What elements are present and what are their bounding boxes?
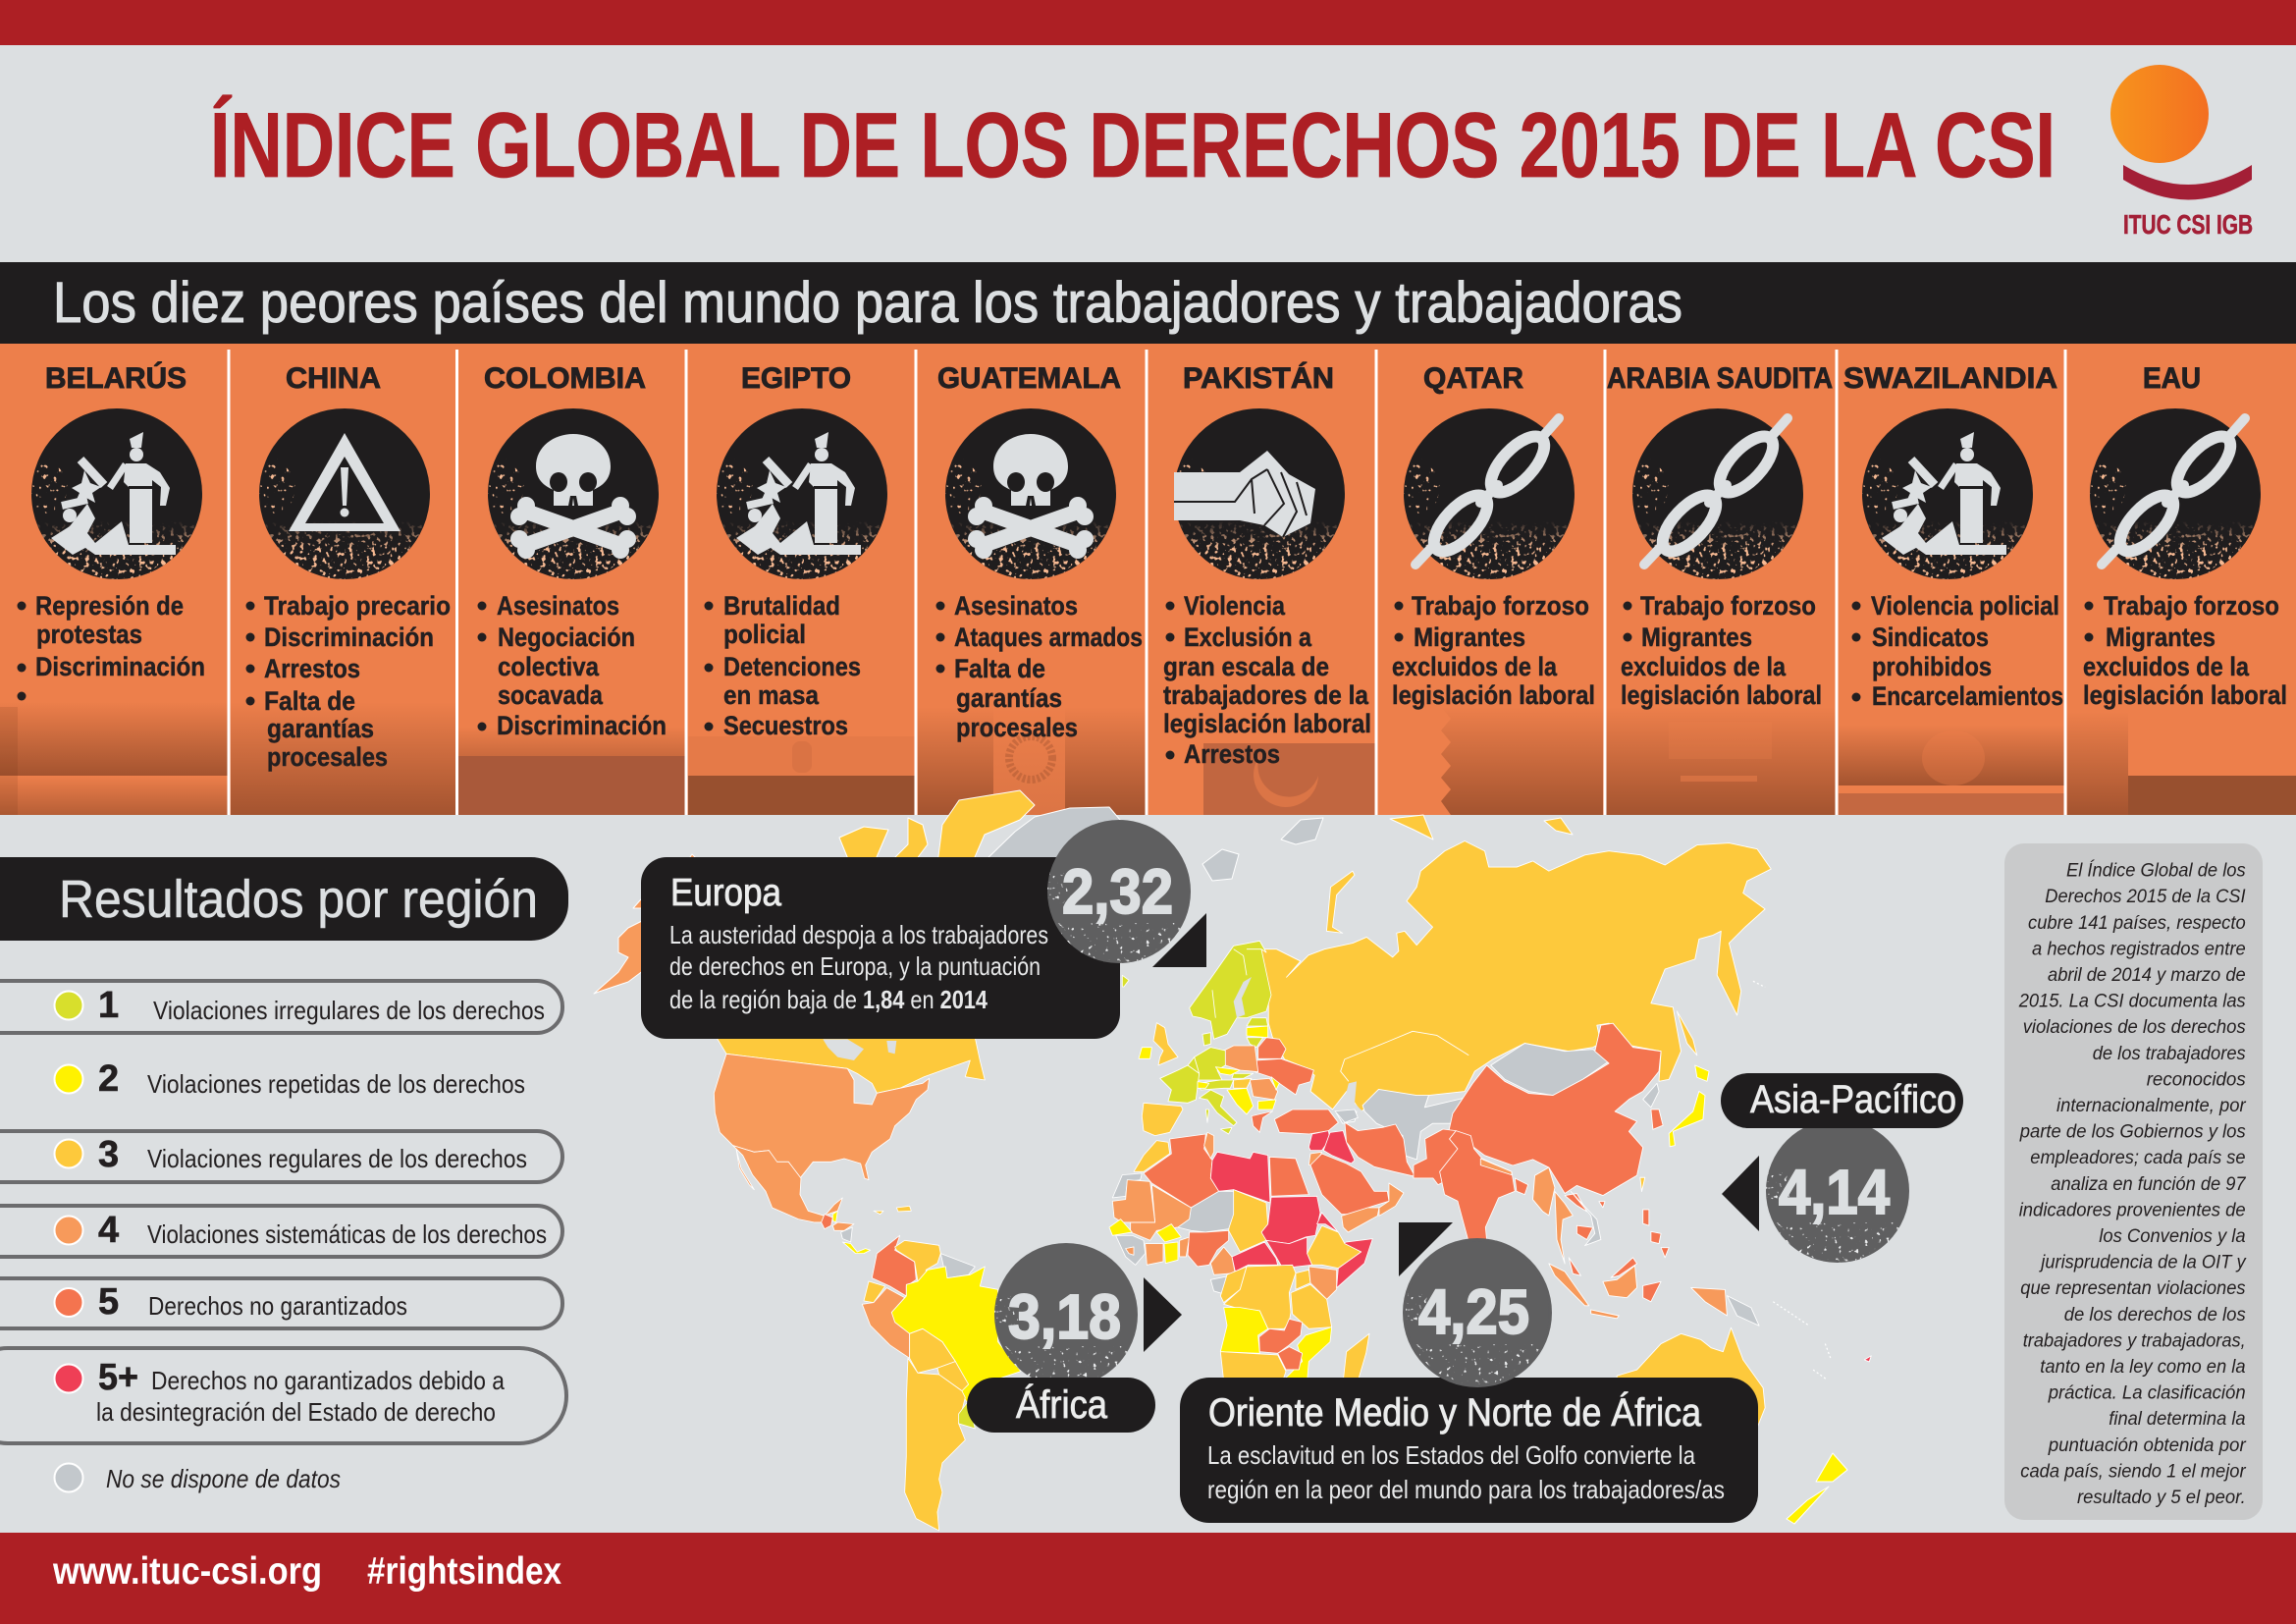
panel: China: garantías (267, 714, 374, 743)
legend: level 5+ (55, 1357, 505, 1427)
panel: Arabia Saudita: excluidos de la (1621, 652, 1787, 681)
panel: Guatemala: procesales (956, 713, 1078, 742)
callout: Europa: 2,32 (1062, 856, 1173, 927)
footer bar: #rightsindex (367, 1550, 561, 1593)
text block: methodology note: internacionalmente, por (2056, 1095, 2247, 1116)
subtitle band: Los diez peores países del mundo para los trabajadores y trabajadoras (53, 271, 1682, 335)
legend: level 5+: 5+ (98, 1357, 138, 1398)
text block: methodology note: violaciones de los derechos (2023, 1016, 2246, 1038)
panel: Guatemala: Asesinatos (954, 591, 1078, 621)
legend: level 3 (55, 1134, 527, 1175)
panel: Qatar (1392, 362, 1603, 815)
callout: Europa: Europa (670, 872, 781, 914)
world map (594, 790, 1871, 1531)
text block: methodology note: jurisprudencia de la OIT y (2038, 1252, 2247, 1273)
legend: level 4 (55, 1210, 547, 1251)
legend: level 1: Violaciones irregulares de los derechos (153, 996, 545, 1025)
panel: Egipto: Detenciones (723, 652, 861, 681)
panel: Swazilandia: prohibidos (1872, 652, 1992, 681)
text block: methodology note: de los trabajadores (2093, 1043, 2246, 1064)
callout: África: África (1016, 1382, 1108, 1427)
panel: EAU: Trabajo forzoso (2104, 591, 2279, 621)
subtitle band (0, 262, 2296, 344)
panel: China: procesales (267, 742, 388, 772)
panel: Colombia: colectiva (498, 652, 600, 681)
text block: methodology note: 2015. La CSI documenta las (2018, 991, 2246, 1012)
text block: methodology note: cubre 141 países, respecto (2028, 912, 2246, 934)
panel: Egipto: Secuestros (723, 711, 848, 740)
text block: methodology note: práctica. La clasificación (2048, 1382, 2246, 1404)
callout: Oriente Medio y Norte de África: región en la peor del mundo para los trabajadores/as (1207, 1475, 1725, 1504)
panel: China: Arrestos (264, 654, 360, 683)
map: New Zealand (1787, 1453, 1847, 1524)
panel: Swazilandia: Sindicatos (1872, 623, 1989, 652)
panel: Egipto: en masa (723, 680, 820, 710)
panel: results by region header (0, 857, 568, 941)
panel: Pakistán: Violencia (1184, 591, 1286, 621)
panel: EAU: Migrantes (2106, 623, 2216, 652)
text block: methodology note: que representan violaciones (2020, 1277, 2246, 1299)
legend: level 5+: Derechos no garantizados debido a (151, 1366, 505, 1395)
legend: level 4: 4 (98, 1210, 119, 1251)
legend: level 1 (55, 985, 545, 1026)
text block: methodology note: reconocidos (2147, 1068, 2246, 1090)
text block: methodology note: cada país, siendo 1 el mejor (2020, 1460, 2247, 1482)
text block: methodology note: analiza en función de 97 (2051, 1173, 2247, 1195)
panel: Belarús (0, 361, 228, 815)
callout: Europa (641, 820, 1206, 1039)
panel: Colombia: Asesinatos (497, 591, 619, 621)
legend: level 5 (55, 1281, 407, 1323)
text block: methodology note: puntuación obtenida por (2048, 1435, 2247, 1456)
panel: Qatar: QATAR (1423, 362, 1523, 395)
panel: Qatar: legislación laboral (1392, 680, 1595, 710)
legend: level 2 (55, 1058, 525, 1100)
panel: Colombia: Discriminación (497, 711, 667, 740)
panel: Guatemala: GUATEMALA (937, 362, 1121, 395)
callout: Europa: La austeridad despoja a los trabajadores (669, 920, 1048, 949)
text block: methodology note: trabajadores y trabajadoras, (2023, 1329, 2246, 1351)
text block: methodology note: final determina la (2109, 1408, 2246, 1430)
text block: methodology note: El Índice Global de los (2066, 859, 2246, 882)
panel: Egipto (688, 362, 916, 815)
text block: methodology note (2004, 843, 2263, 1520)
panel: Colombia: Negociación (498, 623, 635, 652)
panel: China: Falta de (264, 686, 355, 716)
orange country band background (0, 344, 2296, 815)
callout: Oriente Medio y Norte de África (1180, 1222, 1758, 1523)
panel: Arabia Saudita: Migrantes (1641, 623, 1752, 652)
panel: EAU: excluidos de la (2083, 652, 2250, 681)
text block: methodology note: Derechos 2015 de la CSI (2045, 886, 2246, 907)
text block: methodology note: de los derechos de los (2064, 1304, 2246, 1326)
panel: Guatemala (918, 362, 1147, 815)
panel: Swazilandia (1839, 362, 2065, 815)
panel: Arabia Saudita: legislación laboral (1621, 680, 1822, 710)
panel: Belarús: Discriminación (35, 652, 205, 681)
callout: Oriente Medio y Norte de África: Oriente Medio y Norte de África (1208, 1390, 1702, 1435)
panel: Guatemala: garantías (956, 683, 1062, 713)
legend: level 4: Violaciones sistemáticas de los derechos (147, 1219, 547, 1249)
panel: Guatemala: Falta de (954, 654, 1045, 683)
panel: Pakistán: gran escala de (1163, 652, 1329, 681)
panel: Pakistán: Arrestos (1184, 739, 1280, 769)
panel: China: Discriminación (264, 623, 434, 652)
panel: Colombia (458, 362, 685, 815)
text block: methodology note: resultado y 5 el peor. (2077, 1487, 2246, 1508)
callout: Europa: de derechos en Europa, y la puntuación (669, 951, 1041, 981)
callout: Oriente Medio y Norte de África: La esclavitud en los Estados del Golfo convierte la (1207, 1440, 1695, 1470)
map: Americas (714, 1038, 1021, 1531)
panel: Belarús: protestas (36, 620, 142, 649)
panel: Egipto: EGIPTO (741, 362, 851, 395)
text block: methodology note: indicadores provenientes de (2019, 1199, 2246, 1220)
callout: África (967, 1243, 1182, 1433)
panel: Qatar: excluidos de la (1392, 652, 1558, 681)
footer bar: www.ituc-csi.org (52, 1550, 322, 1593)
panel: Belarús: Represión de (35, 591, 184, 621)
panel: Pakistán: PAKISTÁN (1183, 361, 1334, 395)
panel: Pakistán: legislación laboral (1163, 709, 1371, 738)
legend: level 5: Derechos no garantizados (148, 1291, 407, 1321)
panel: China: Trabajo precario (264, 591, 451, 621)
panel: Egipto: Brutalidad (723, 591, 840, 621)
map: Arctic, Alaska and Greenland (594, 790, 1573, 994)
panel: Pakistán: trabajadores de la (1163, 680, 1369, 710)
map: Russia, Central and East Asia, Oceania (1260, 841, 1871, 1428)
legend: level 2: 2 (98, 1058, 119, 1100)
legend: level 2: Violaciones repetidas de los derechos (147, 1069, 525, 1099)
panel: Pakistán (1163, 361, 1375, 815)
map: Europe, Africa, Middle East, South Asia (1109, 941, 1528, 1381)
panel: Swazilandia: SWAZILANDIA (1843, 362, 2057, 395)
callout: Europa: de la región baja de 1,84 en 2014 (669, 985, 988, 1014)
legend: level 3: Violaciones regulares de los derechos (147, 1144, 527, 1173)
text block: methodology note: empleadores; cada país se (2030, 1147, 2246, 1168)
panel: Colombia: socavada (498, 680, 604, 710)
panel: Qatar: Migrantes (1414, 623, 1525, 652)
panel: China (231, 362, 456, 815)
legend (0, 981, 566, 1493)
text block: methodology note: tanto en la ley como en la (2040, 1356, 2246, 1378)
panel: EAU (2067, 362, 2296, 815)
legend: level 5: 5 (98, 1281, 119, 1323)
callout: Asia-Pacífico: 4,14 (1779, 1157, 1890, 1227)
panel: Belarús: BELARÚS (45, 361, 187, 395)
panel: Egipto: policial (723, 620, 806, 649)
panel: Swazilandia: Encarcelamientos (1872, 681, 2063, 711)
panel: EAU: EAU (2143, 362, 2201, 395)
panel: Qatar: Trabajo forzoso (1412, 591, 1589, 621)
footer bar (0, 1533, 2296, 1624)
logo: ITUC CSI IGB (2110, 65, 2253, 240)
panel: Arabia Saudita (1606, 362, 1836, 815)
panel: Pakistán: Exclusión a (1184, 623, 1312, 652)
legend: level 5+: la desintegración del Estado de derecho (96, 1397, 496, 1427)
legend: level 1: 1 (98, 985, 119, 1026)
panel: Swazilandia: Violencia policial (1871, 591, 2059, 621)
text block: methodology note: los Convenios y la (2099, 1225, 2246, 1247)
legend: level 3: 3 (98, 1134, 119, 1175)
callout: Asia-Pacífico: Asia-Pacífico (1750, 1078, 1956, 1121)
panel: China: CHINA (286, 362, 381, 395)
callout: Oriente Medio y Norte de África: 4,25 (1418, 1276, 1529, 1347)
text block: methodology note: parte de los Gobiernos y los (2019, 1121, 2246, 1143)
panel: Arabia Saudita: ARABIA SAUDITA (1607, 362, 1833, 395)
panel: results by region header: Resultados por región (59, 870, 538, 929)
panel: Arabia Saudita: Trabajo forzoso (1640, 591, 1816, 621)
panel: Guatemala: Ataques armados (954, 623, 1143, 652)
callout: África: 3,18 (1008, 1281, 1121, 1352)
text block: methodology note: a hechos registrados entre (2032, 938, 2246, 959)
callout: Asia-Pacífico (1721, 1073, 1963, 1265)
top red bar (0, 0, 2296, 45)
legend: no data: No se dispone de datos (106, 1464, 341, 1493)
panel: Colombia: COLOMBIA (484, 362, 646, 395)
text block: methodology note: abril de 2014 y marzo de (2048, 964, 2246, 986)
logo: ITUC CSI IGB: ITUC CSI IGB (2123, 209, 2253, 240)
